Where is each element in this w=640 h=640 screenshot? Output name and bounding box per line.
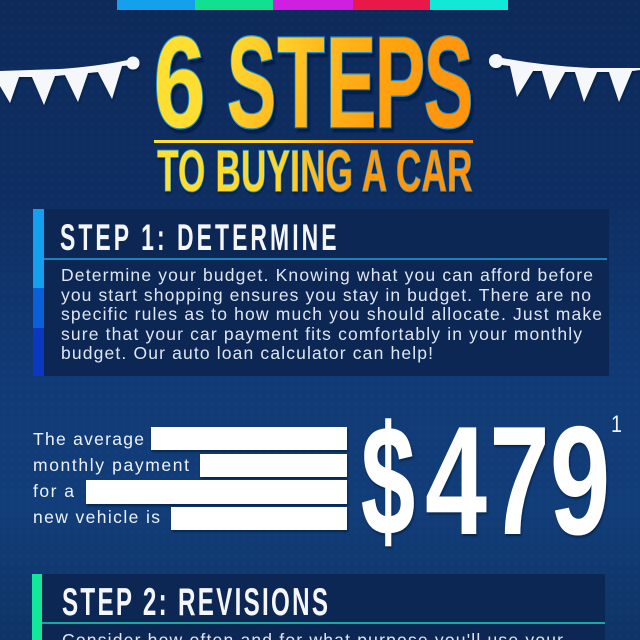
stat text: monthly payment — [33, 455, 189, 475]
stat bars — [86, 427, 347, 530]
stat text: for a — [33, 481, 74, 501]
stat value: 9 — [550, 395, 610, 568]
title rule — [154, 140, 473, 143]
title: 6 steps: P — [375, 10, 425, 155]
stat value — [361, 394, 610, 568]
stat text: new vehicle is — [33, 507, 160, 527]
title: 6 steps: T — [277, 9, 325, 155]
subtitle: to buying a car: TO BUYING A CAR — [157, 140, 472, 204]
step 1 body text: budget. Our auto loan calculator can help! — [61, 343, 433, 363]
step 1 body text: specific rules as to how much you should allocate. Just make — [61, 304, 602, 324]
footnote marker: 1 — [611, 411, 622, 438]
stat text: The average — [33, 429, 144, 449]
stat value: 4 — [425, 394, 487, 567]
step 1 body text: sure that your car payment fits comfortably in your monthly — [61, 324, 582, 344]
right bunting — [489, 54, 640, 102]
step 1 body text: you start shopping ensures you stay in budget. There are no — [61, 285, 591, 305]
title: 6 steps: S — [424, 10, 473, 155]
title: 6 steps — [153, 9, 473, 156]
top colour bar — [117, 0, 508, 10]
title: 6 steps: E — [326, 10, 376, 155]
stat value: 7 — [489, 395, 550, 568]
title: 6 steps: S — [227, 10, 276, 155]
panel: step 1 — [33, 209, 609, 376]
stat value: $ — [361, 395, 415, 568]
left bunting — [0, 56, 140, 105]
title: 6 steps: 6 — [153, 10, 206, 156]
stat: average monthly payment — [33, 394, 622, 568]
step 1 body text: Determine your budget. Knowing what you can afford before — [61, 265, 593, 285]
step 2 heading: STEP 2: REVISIONS — [62, 580, 328, 623]
step 1 body text — [61, 265, 602, 363]
stat text — [33, 429, 189, 527]
step 2 colour bar — [32, 574, 42, 640]
step 1 colour bar — [33, 209, 44, 376]
step 1 heading: STEP 1: DETERMINE — [60, 216, 337, 258]
panel: step 2 — [32, 574, 605, 640]
